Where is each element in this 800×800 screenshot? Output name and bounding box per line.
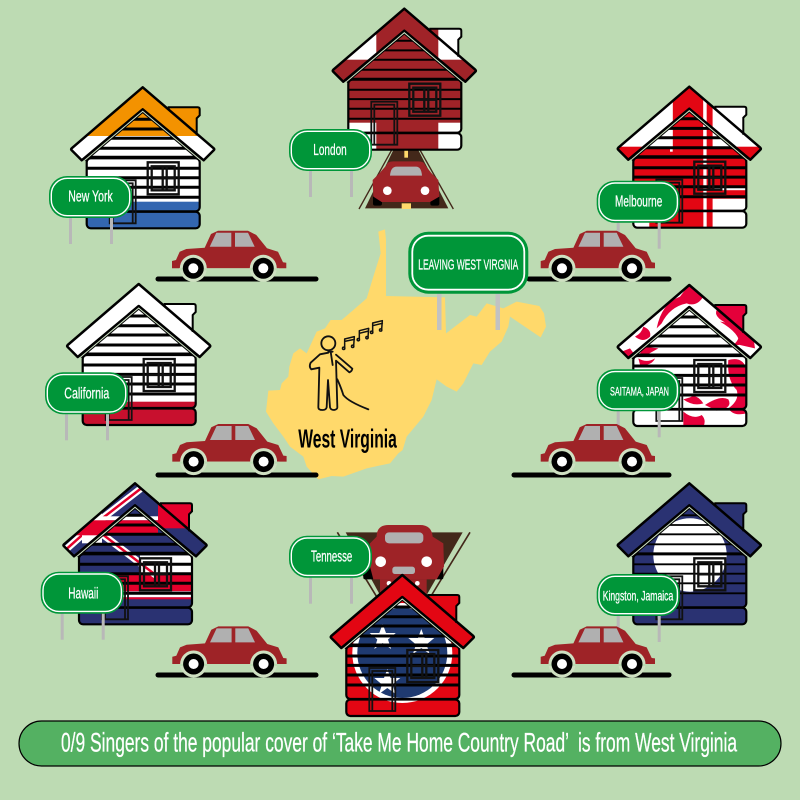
house: Hawaii flag <box>62 482 208 626</box>
road sign: New York: New York <box>68 189 113 206</box>
road <box>514 672 669 678</box>
road sign: California <box>45 372 128 440</box>
road <box>529 276 669 282</box>
scene: Tennessee <box>289 525 482 720</box>
road sign: Leaving West Virginia <box>408 232 528 330</box>
icon: singer with microphone <box>310 321 382 410</box>
car <box>541 231 655 282</box>
road sign: Hawaii <box>41 572 124 640</box>
car <box>172 424 287 475</box>
house: England flag <box>332 7 478 151</box>
banner <box>19 721 781 766</box>
road sign: Kingston, Jamaica <box>597 574 680 642</box>
house: Tennessee flag <box>330 574 476 718</box>
car <box>541 424 655 475</box>
house: Melbourne flag <box>616 85 762 229</box>
road sign: Melbourne: Melbourne <box>615 194 662 211</box>
scene: Kingston <box>514 478 769 678</box>
road sign: Kingston, Jamaica: Kingston, Jamaica <box>603 588 673 604</box>
West Virginia label: West Virginia <box>298 424 397 454</box>
road sign: New York <box>49 176 132 244</box>
scene: London <box>289 4 484 209</box>
house: California flag <box>66 282 212 426</box>
road sign: Tennessee: Tennesse <box>311 549 352 566</box>
road sign: Leaving West Virginia: LEAVING WEST VIRGNIA <box>418 256 518 273</box>
road <box>158 672 316 678</box>
road <box>158 276 316 282</box>
scene: California <box>45 279 316 475</box>
road sign: Tennessee <box>289 536 372 604</box>
house: Saitama flag <box>616 284 762 428</box>
car <box>541 626 655 678</box>
road and rear car <box>337 525 470 597</box>
scene: Hawaii <box>41 475 316 678</box>
road sign: London: London <box>313 142 347 159</box>
road sign: California: California <box>64 385 109 402</box>
car <box>172 231 286 282</box>
road sign: Saitama, Japan <box>597 369 680 437</box>
West Virginia map <box>266 229 546 479</box>
scene: New York <box>49 82 316 282</box>
car <box>172 626 287 678</box>
scene: Saitama <box>514 280 769 475</box>
road sign: London <box>289 129 372 197</box>
house: Jamaica flag <box>616 482 762 626</box>
icon: music notes <box>342 321 382 349</box>
road sign: Hawaii: Hawaii <box>68 585 98 602</box>
road sign: Saitama, Japan: SAITAMA, JAPAN <box>610 387 669 399</box>
scene: Melbourne <box>529 82 769 282</box>
road <box>514 472 669 478</box>
house: New York flag <box>70 86 216 230</box>
road sign: Melbourne <box>597 181 680 249</box>
road <box>158 472 316 478</box>
road and front car <box>359 150 453 209</box>
